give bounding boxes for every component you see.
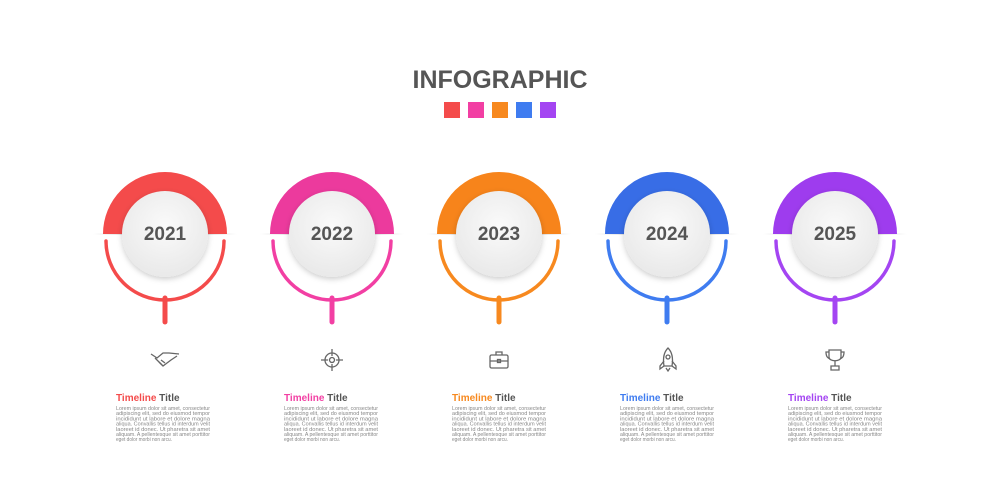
step 2022: 2022 <box>311 224 353 245</box>
step 2025 <box>763 172 907 322</box>
icon: target <box>321 349 343 371</box>
icon: briefcase <box>490 352 508 368</box>
step 2025: 2025 <box>814 224 857 245</box>
text block 2025: Timeline Title <box>788 393 852 404</box>
text block 2025 <box>788 393 883 443</box>
text block 2022 <box>284 393 379 443</box>
text block 2021 <box>116 393 211 443</box>
text block 2024 <box>620 393 715 443</box>
title: INFOGRAPHIC <box>412 66 588 94</box>
step 2023 <box>427 172 571 322</box>
text block 2023: Timeline Title <box>452 393 516 404</box>
icon: rocket <box>660 348 676 371</box>
step 2024 <box>595 172 739 322</box>
text block 2021: Timeline Title <box>116 393 180 404</box>
step 2022 <box>260 172 404 322</box>
step 2024: 2024 <box>646 224 689 245</box>
icon: handshake <box>151 353 179 366</box>
text block 2023 <box>452 393 547 443</box>
text block 2022: Timeline Title <box>284 393 348 404</box>
step 2021 <box>93 172 237 322</box>
color squares <box>444 102 556 118</box>
step 2023: 2023 <box>478 224 520 245</box>
text block 2024: Timeline Title <box>620 393 684 404</box>
step 2021: 2021 <box>144 224 187 245</box>
icon: trophy <box>826 350 844 370</box>
